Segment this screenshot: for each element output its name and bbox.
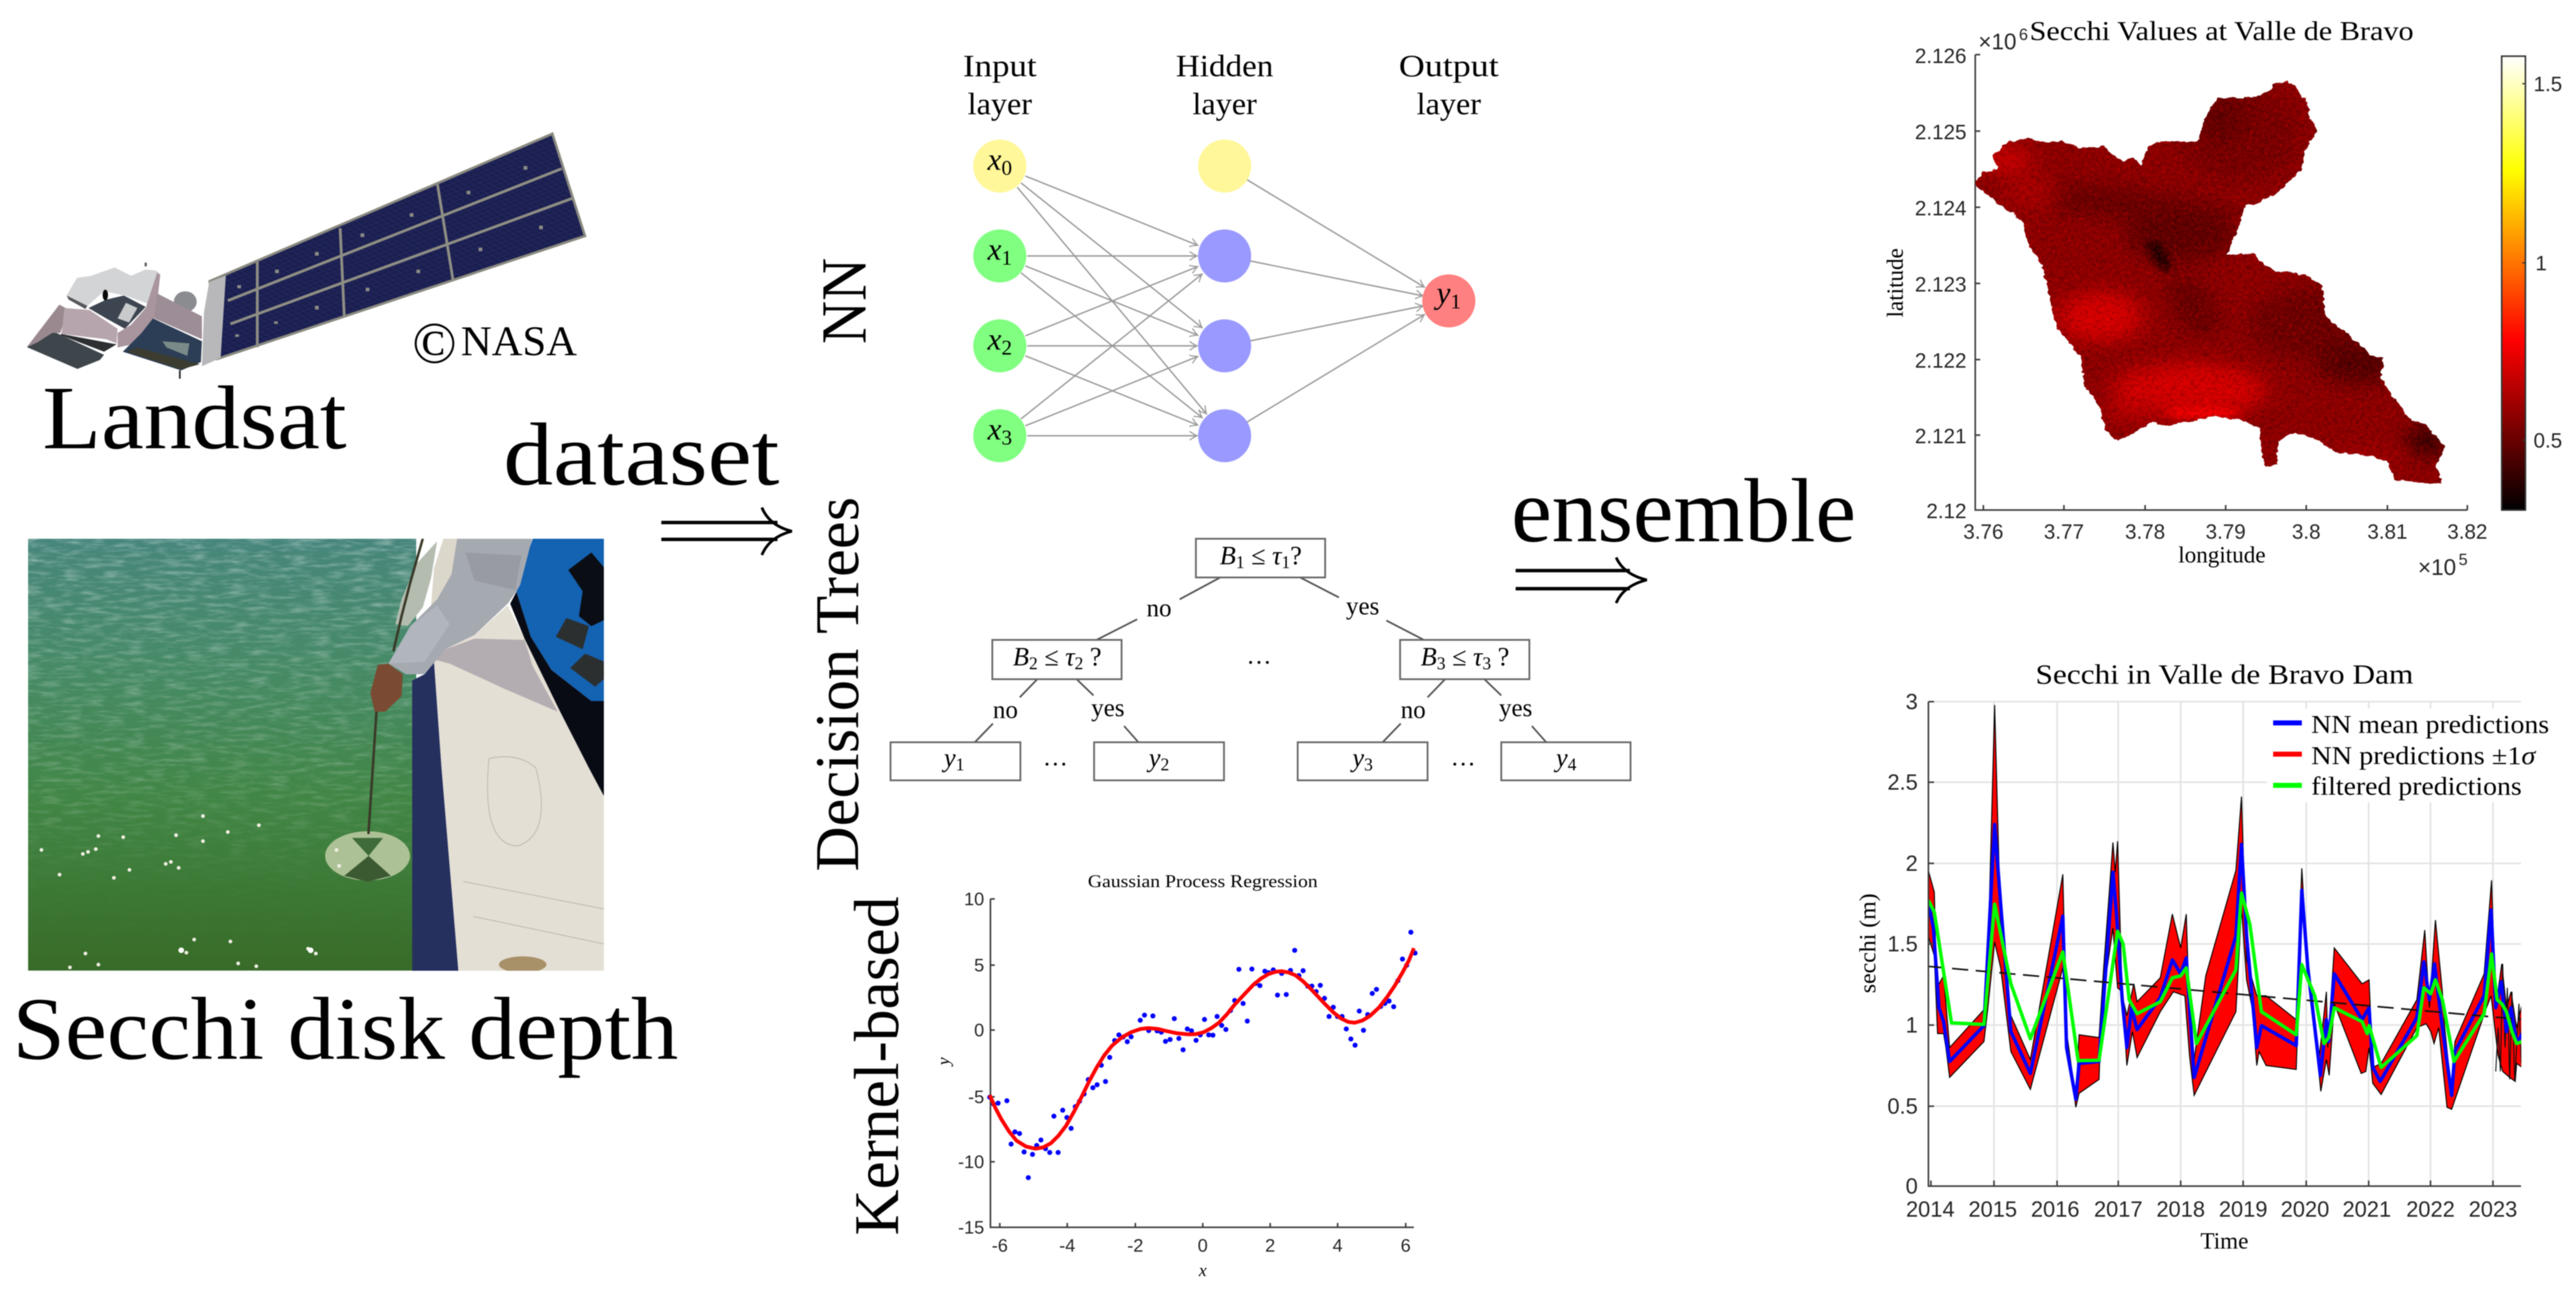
y tick labels	[1887, 690, 1918, 1199]
deck shadow	[435, 639, 558, 712]
branch labels: …	[1043, 743, 1068, 771]
node labels: x	[987, 142, 1002, 177]
y tick labels: 2.125	[1915, 120, 1967, 144]
legend: NN predictions ±1 σ	[2311, 741, 2537, 770]
branch labels: no	[1401, 695, 1426, 724]
leaf values	[942, 744, 1576, 775]
x tick labels: 2022	[2406, 1197, 2455, 1222]
branch labels: yes	[1091, 694, 1125, 722]
label: NN: NN	[809, 258, 880, 344]
x tick labels: 2	[1265, 1236, 1275, 1256]
lake heatmap	[1952, 64, 2477, 504]
leaf values: 3	[1364, 755, 1373, 775]
x tick labels: 2021	[2342, 1197, 2391, 1222]
node labels: x	[987, 322, 1002, 356]
y tick labels: 1	[1906, 1013, 1918, 1038]
boat deck	[434, 606, 604, 971]
y tick labels	[958, 890, 984, 1238]
node labels: 1	[1451, 290, 1461, 313]
icon: Landsat satellite	[27, 134, 585, 379]
leaf values: 4	[1567, 755, 1576, 775]
axis label x: x	[1198, 1261, 1207, 1280]
deck strip	[431, 539, 457, 607]
x exponent	[2418, 550, 2467, 580]
y tick labels: 2.121	[1915, 425, 1967, 448]
x tick labels: 3.81	[2367, 520, 2407, 543]
x tick labels	[1963, 520, 2487, 543]
x tick labels: -4	[1059, 1236, 1075, 1256]
node labels: x	[987, 411, 1002, 446]
caption: NASA credit: NASA	[461, 317, 577, 365]
layer titles: Output	[1399, 48, 1499, 83]
split conditions: B	[1013, 643, 1029, 672]
leaf values: y	[1554, 744, 1568, 773]
y tick labels: -10	[958, 1152, 984, 1172]
split conditions: 3	[1483, 654, 1491, 674]
branch labels: …	[1246, 641, 1271, 669]
dark boat interior	[510, 592, 605, 796]
y tick labels: 10	[964, 890, 984, 910]
x tick labels: 2015	[1968, 1197, 2017, 1222]
split conditions: ?	[1083, 643, 1102, 672]
tree boxes	[891, 539, 1631, 780]
caption: NASA credit	[412, 311, 577, 376]
label: Kernel-based: Kernel-based	[842, 896, 912, 1235]
x tick labels: 3.82	[2447, 520, 2487, 543]
node labels: 3	[1002, 426, 1012, 449]
solar array	[210, 134, 585, 359]
axes	[990, 899, 1414, 1227]
branch labels: yes	[1346, 592, 1379, 620]
axis label: Time: Time	[2201, 1229, 2248, 1254]
node labels: 2	[1002, 336, 1012, 360]
x tick labels: -2	[1127, 1236, 1143, 1256]
filtered predictions line	[1928, 893, 2522, 1068]
split conditions: ?	[1491, 643, 1509, 672]
layer titles: layer	[1193, 86, 1257, 121]
boat hull	[412, 662, 458, 971]
blue samples	[990, 932, 1415, 1177]
node labels: y	[1433, 275, 1451, 310]
split conditions: 3	[1437, 654, 1446, 674]
leaf values: y	[1147, 744, 1161, 773]
hand	[370, 664, 403, 712]
water and disk	[28, 539, 417, 971]
x tick labels: 3.76	[1963, 520, 2003, 543]
axis label: latitude: latitude	[1883, 248, 1908, 317]
chart title: Secchi in Valle de Bravo Dam	[2036, 659, 2413, 690]
spacecraft body	[27, 263, 226, 379]
split conditions	[1013, 542, 1509, 674]
axis label y: y	[934, 1057, 954, 1067]
grey sleeve	[388, 539, 532, 674]
split conditions: ?	[1290, 542, 1302, 571]
blue jacket	[516, 539, 605, 701]
colorbar	[2502, 56, 2562, 510]
chart: Secchi time series	[1855, 659, 2549, 1254]
axis label: longitude: longitude	[2178, 542, 2266, 568]
split conditions: 2	[1029, 654, 1038, 674]
y tick labels: 5	[974, 956, 984, 976]
chart: Gaussian Process Regression	[934, 871, 1415, 1280]
NN mean predictions line	[1928, 825, 2522, 1099]
connections	[1017, 176, 1424, 436]
x tick labels: -6	[992, 1236, 1008, 1256]
layer titles: Hidden	[1176, 48, 1273, 83]
split conditions: 1	[1281, 553, 1290, 572]
y tick labels: -5	[968, 1087, 984, 1107]
x tick labels: 3.77	[2044, 520, 2084, 543]
branch labels: no	[1147, 594, 1172, 622]
branch labels: …	[1451, 743, 1476, 771]
x tick labels: 2017	[2094, 1197, 2143, 1222]
node labels	[987, 142, 1461, 449]
x tick labels	[1906, 1197, 2517, 1222]
caption: NASA credit: ©	[412, 311, 456, 376]
x tick labels: 2016	[2031, 1197, 2080, 1222]
prediction band	[1928, 705, 2522, 1109]
arrow: models to ensemble outputs	[1516, 557, 1647, 603]
fender	[395, 541, 437, 626]
x exponent: 5	[2459, 550, 2467, 569]
y tick labels: 2.122	[1915, 349, 1967, 372]
label: Decision Trees: Decision Trees	[802, 497, 872, 871]
branch labels: yes	[1499, 694, 1532, 722]
y tick labels: 2.126	[1915, 44, 1967, 67]
x tick labels: 3.79	[2206, 520, 2246, 543]
x tick labels: 3.78	[2125, 520, 2165, 543]
split conditions: B	[1220, 542, 1236, 571]
heading: Secchi disk depth: Secchi disk depth	[12, 979, 678, 1078]
y tick labels: 2.123	[1915, 273, 1967, 296]
layer titles	[963, 48, 1499, 121]
y tick labels: 0	[974, 1021, 984, 1041]
y tick labels: 0	[1906, 1174, 1918, 1199]
split conditions: ≤	[1446, 643, 1473, 672]
split conditions: ≤	[1038, 643, 1065, 672]
y exponent	[1978, 25, 2028, 54]
legend: filtered predictions	[2311, 772, 2522, 800]
x tick labels: 2018	[2156, 1197, 2205, 1222]
dashed trend line	[1928, 966, 2521, 1019]
y tick labels: 2	[1906, 852, 1918, 876]
y exponent: ×10	[1978, 29, 2016, 54]
layer titles: layer	[1416, 86, 1481, 121]
leaf values: 2	[1160, 755, 1169, 775]
tree edges	[975, 577, 1546, 742]
colorbar: 1.5	[2534, 72, 2562, 96]
y tick labels: -15	[958, 1218, 984, 1238]
y tick labels: 2.5	[1887, 770, 1918, 795]
x tick labels: 2019	[2219, 1197, 2268, 1222]
node labels: 0	[1002, 157, 1012, 180]
legend	[2267, 709, 2549, 802]
x tick labels: 2023	[2469, 1197, 2517, 1222]
red regression curve	[990, 948, 1414, 1149]
layer titles: Input	[963, 48, 1037, 83]
heading: ensemble: ensemble	[1511, 460, 1856, 561]
colorbar: 1	[2535, 252, 2547, 275]
layer titles: layer	[968, 86, 1032, 121]
diagram: neural network	[963, 48, 1499, 462]
x tick labels: 0	[1198, 1236, 1208, 1256]
leaf values: y	[942, 744, 956, 773]
split conditions: 1	[1236, 553, 1245, 572]
nodes	[973, 140, 1475, 462]
split conditions: τ	[1272, 542, 1283, 571]
x tick labels: 3.8	[2292, 520, 2321, 543]
y tick labels: 2.124	[1915, 197, 1967, 220]
legend: NN mean predictions	[2311, 710, 2549, 739]
heading: Landsat: Landsat	[42, 368, 347, 468]
colorbar: 0.5	[2534, 429, 2562, 452]
x tick labels: 2020	[2281, 1197, 2329, 1222]
y tick labels: 0.5	[1887, 1094, 1918, 1119]
arrow: dataset to models	[661, 508, 792, 555]
diagram: decision tree	[891, 539, 1631, 780]
x exponent: ×10	[2418, 554, 2456, 580]
y tick labels	[1915, 44, 1967, 523]
axes	[1975, 55, 2467, 510]
x tick labels: 2014	[1906, 1197, 1955, 1222]
node labels: 1	[1002, 247, 1012, 270]
x tick labels: 4	[1333, 1236, 1343, 1256]
split conditions: τ	[1065, 643, 1076, 672]
branch labels: no	[993, 695, 1018, 724]
x tick labels	[992, 1236, 1411, 1256]
branch labels	[993, 592, 1532, 771]
y exponent: 6	[2019, 25, 2028, 44]
chart title: Gaussian Process Regression	[1088, 871, 1318, 891]
x tick labels: 6	[1401, 1236, 1411, 1256]
photo: Secchi disk measurement from a boat	[28, 539, 605, 973]
axes	[1928, 702, 2521, 1186]
grid	[1928, 702, 2521, 1186]
y tick labels: 1.5	[1887, 932, 1918, 956]
chart title: Secchi Values at Valle de Bravo	[2030, 17, 2414, 46]
node labels: x	[987, 232, 1002, 267]
leaf values: y	[1350, 744, 1364, 773]
split conditions: B	[1421, 643, 1437, 672]
leaf values: 1	[955, 755, 964, 775]
heading: dataset: dataset	[503, 405, 779, 504]
split conditions: τ	[1473, 643, 1484, 672]
split conditions: ≤	[1245, 542, 1272, 571]
split conditions: 2	[1075, 654, 1083, 674]
chart: Secchi map of Valle de Bravo	[1883, 17, 2562, 580]
y tick labels: 3	[1906, 690, 1918, 714]
axis label: secchi (m): secchi (m)	[1855, 893, 1881, 993]
y tick labels: 2.12	[1927, 499, 1967, 523]
rope	[368, 539, 423, 834]
